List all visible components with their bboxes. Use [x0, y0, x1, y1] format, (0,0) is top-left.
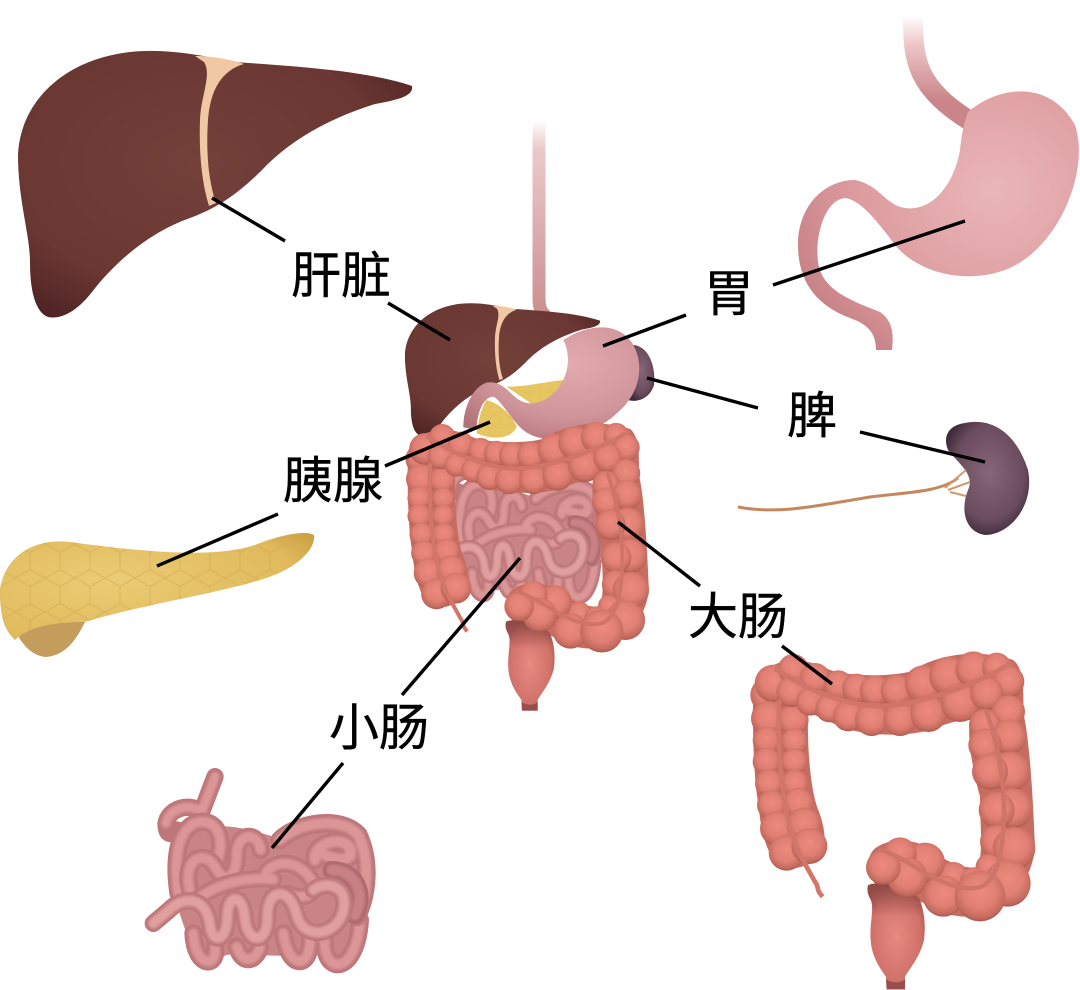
organ: large small intestine [153, 777, 369, 964]
leader lines [157, 198, 985, 848]
organ: large stomach [798, 15, 1079, 350]
label: pancreas: 胰腺 [283, 453, 383, 509]
diagram: central digestive system [405, 120, 654, 711]
organ: large pancreas [0, 533, 314, 657]
label: spleen: 脾 [787, 388, 837, 444]
label: small intestine: 小肠 [329, 700, 429, 756]
central liver [405, 303, 600, 435]
central colon [405, 422, 649, 711]
label: liver: 肝脏 [291, 248, 391, 304]
central spleen [628, 345, 654, 401]
label: stomach: 胃 [704, 266, 754, 322]
organ: large colon [750, 651, 1035, 989]
central pancreas [477, 380, 563, 438]
label: large intestine: 大肠 [688, 589, 788, 645]
central small intestine [443, 448, 601, 597]
central stomach [463, 327, 639, 439]
organ: large liver [18, 51, 412, 318]
organ: large spleen with artery [738, 422, 1029, 535]
esophagus [539, 120, 546, 316]
